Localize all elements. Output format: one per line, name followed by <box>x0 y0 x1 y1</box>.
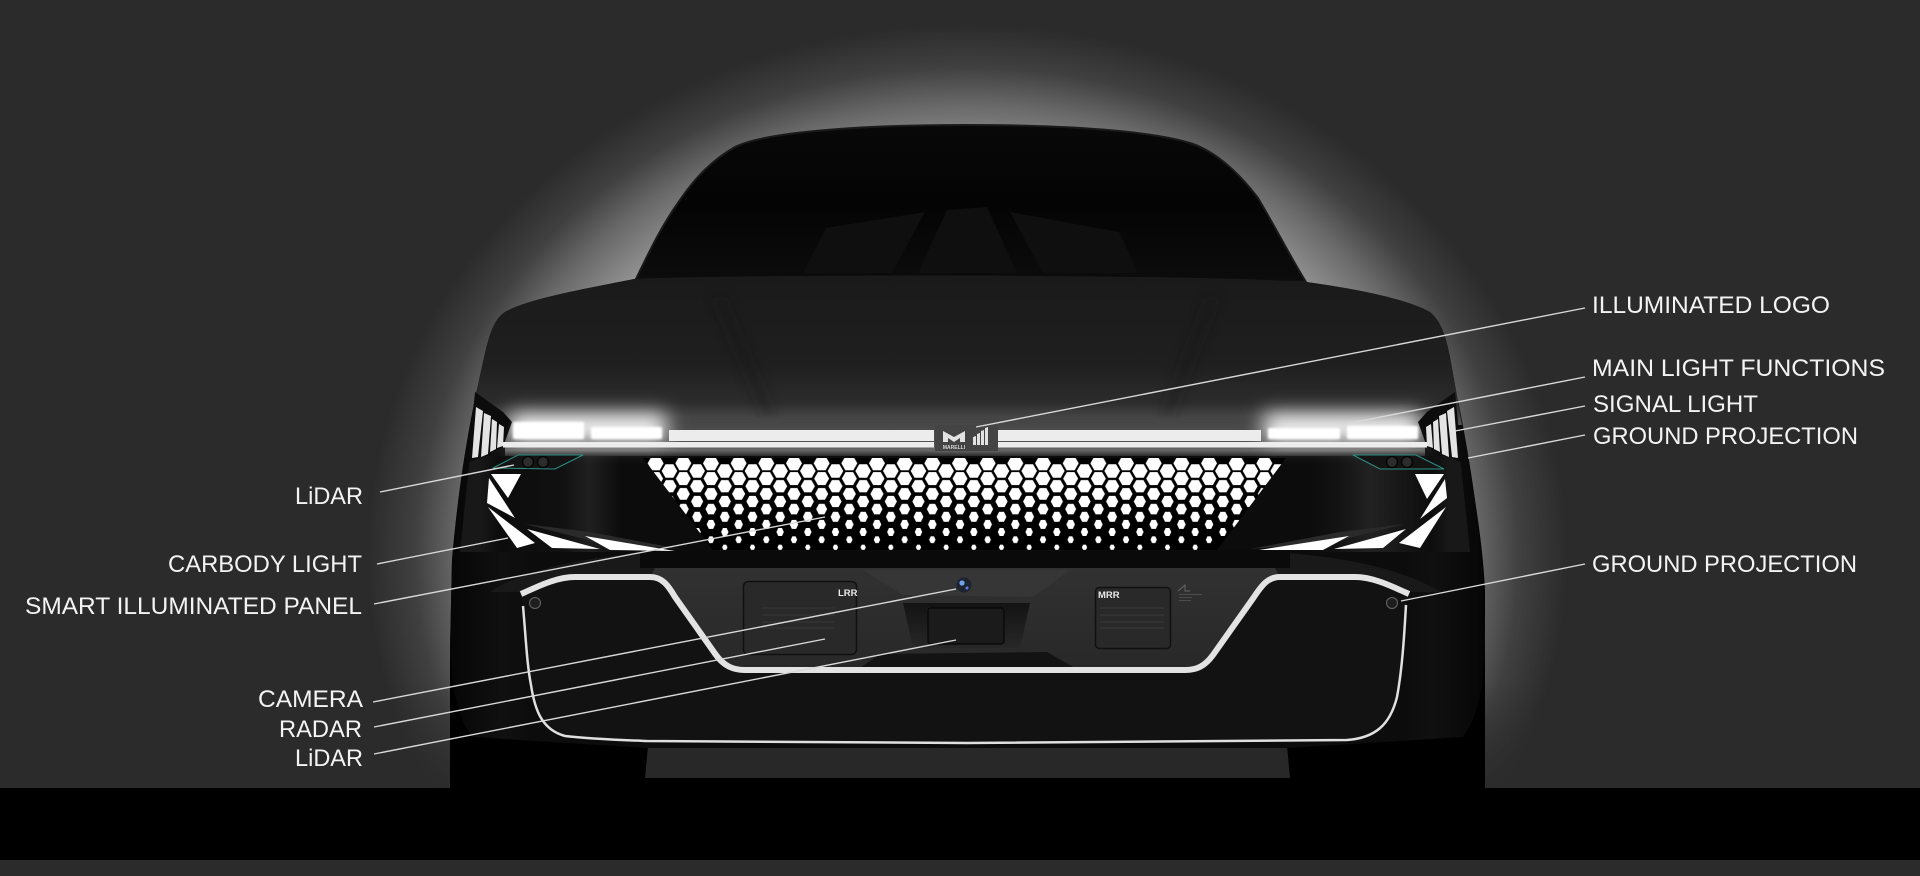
under-lamp housing <box>460 456 1470 552</box>
signal light right <box>1426 407 1458 458</box>
labels right <box>1592 292 1885 578</box>
groove below panel <box>640 551 1290 568</box>
label: LiDAR lower: LiDAR <box>295 745 363 772</box>
lamp bloom <box>510 414 1420 440</box>
label: smart illuminated panel: SMART ILLUMINATED PANEL <box>25 593 362 620</box>
left ground projector <box>530 598 540 608</box>
car silhouette and tyres <box>450 279 1485 788</box>
windshield <box>635 125 1306 282</box>
smart illuminated panel <box>643 458 1286 550</box>
hood <box>472 276 1462 425</box>
long range radar box: LRR <box>838 588 858 599</box>
label: carbody light: CARBODY LIGHT <box>168 551 362 578</box>
swoosh highlights <box>525 524 1405 549</box>
label: signal light: SIGNAL LIGHT <box>1593 391 1758 418</box>
label: camera: CAMERA <box>258 686 363 713</box>
light bar housing <box>505 418 1425 456</box>
brand name: MARELLI <box>943 445 966 451</box>
leader lines <box>373 308 1585 754</box>
right ground projector <box>1386 598 1398 608</box>
long range radar box <box>744 582 858 654</box>
main light functions left <box>513 422 662 439</box>
wing below lamps <box>490 552 1440 592</box>
car <box>450 125 1485 788</box>
left signal housing <box>468 392 512 463</box>
small AL mark <box>1178 585 1202 601</box>
glow edge over lamps <box>515 424 1416 438</box>
main light functions right <box>1268 426 1418 439</box>
label: main light functions: MAIN LIGHT FUNCTIONS <box>1592 355 1885 382</box>
label: LiDAR upper: LiDAR <box>295 483 363 510</box>
LiDAR right <box>1353 455 1444 469</box>
thick bumper light line <box>521 577 1409 670</box>
camera <box>956 578 972 592</box>
central LiDAR recess <box>903 603 1030 648</box>
carbody light left <box>487 474 675 551</box>
illuminated logo <box>935 425 998 451</box>
label: ground projection lower: GROUND PROJECTION <box>1592 551 1857 578</box>
brand mark <box>943 431 965 442</box>
labels left <box>25 483 363 772</box>
mid range radar box: MRR <box>1098 590 1120 601</box>
long light bars <box>503 430 1427 448</box>
label: ground projection upper: GROUND PROJECTION <box>1593 423 1858 450</box>
mid range radar box <box>1096 588 1170 648</box>
signal light left <box>472 407 504 458</box>
cabin seats <box>803 207 1138 273</box>
lower body <box>450 400 1485 748</box>
central sensor fascia <box>650 568 1280 670</box>
signal bars mark <box>973 427 988 445</box>
label: illuminated logo: ILLUMINATED LOGO <box>1592 292 1830 319</box>
LiDAR left <box>493 455 583 469</box>
carbody light right <box>1259 474 1447 550</box>
bumper dark insert <box>521 577 1409 743</box>
label: radar: RADAR <box>279 716 362 743</box>
thin lower light line <box>523 605 1406 743</box>
ground band <box>0 788 1920 860</box>
halo glow behind car <box>340 0 1600 788</box>
road strip between tyres <box>645 746 1290 778</box>
right signal housing <box>1418 392 1462 463</box>
